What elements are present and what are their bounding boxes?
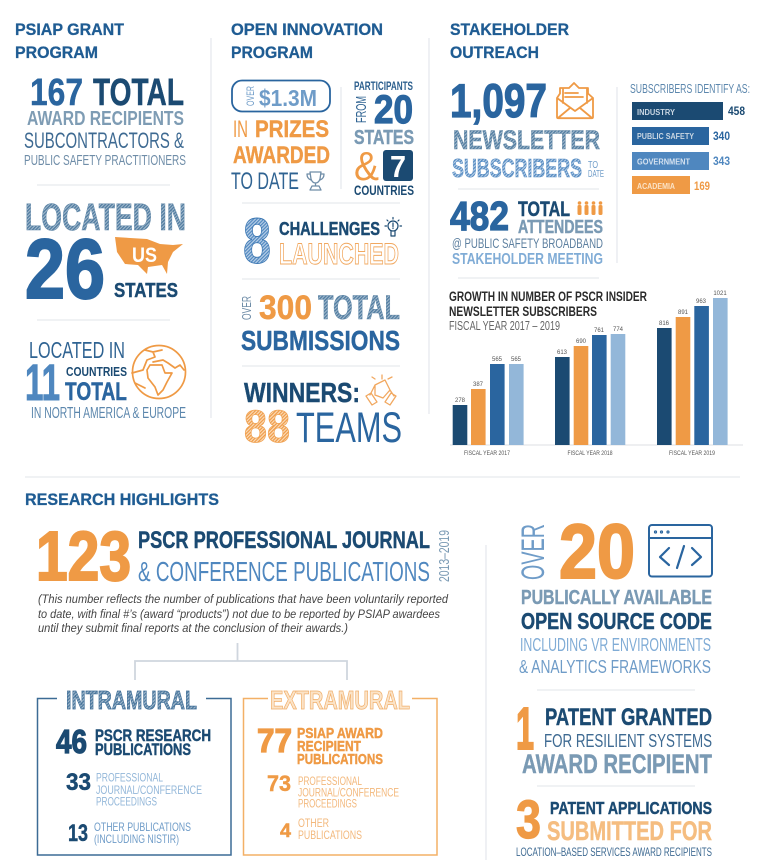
stat: 77 award recipient publications: PUBLICATIONS	[297, 752, 383, 768]
stat: over $1.3M in prizes: TO DATE	[231, 168, 299, 195]
stat: 3 patent applications	[516, 790, 712, 859]
stat: 1 patent granted	[516, 696, 712, 779]
bars: fiscal year 2018: FISCAL YEAR 2018	[568, 451, 613, 457]
stat: over $1.3M in prizes: AWARDED	[233, 142, 330, 169]
icon: US map: US	[132, 244, 157, 267]
stat: over 300 total submissions: TOTAL	[318, 289, 400, 327]
stat: 8 challenges launched	[243, 205, 399, 277]
bar: industry: 458	[728, 104, 745, 118]
stat: 123 publications: & CONFERENCE PUBLICATIONS	[138, 556, 430, 587]
heading: research highlights: RESEARCH HIGHLIGHTS	[25, 490, 219, 509]
heading: stakeholder outreach	[450, 20, 569, 62]
stat: 1,097 newsletter subscribers: SUBSCRIBERS	[452, 153, 582, 183]
stat: 8 challenges launched: LAUNCHED	[279, 238, 399, 271]
stat: winners 88 teams: TEAMS	[296, 404, 402, 452]
bar: industry	[632, 102, 745, 120]
stat: 482 total attendees: STAKEHOLDER MEETING	[452, 251, 603, 268]
stat: located in 11 countries: IN NORTH AMERICA & EUROPE	[31, 405, 186, 422]
heading: PSIAP grant program: PSIAP GRANT	[15, 20, 125, 39]
stat: 482 total attendees: 482	[450, 193, 509, 239]
bars: fiscal year 2017: 387	[473, 382, 484, 388]
stat: 8 challenges launched: CHALLENGES	[279, 218, 380, 239]
stat: 73 professional proceedings	[267, 771, 399, 810]
bars: fiscal year 2019: FISCAL YEAR 2019	[669, 451, 716, 457]
note: publication caveat: until they submit final reports at the conclusion of their awards.)	[38, 623, 348, 635]
stat: over 20 open source code: 20	[559, 509, 635, 595]
stat: 13 other publications: OTHER PUBLICATIONS	[94, 820, 191, 834]
stat: 73 professional proceedings: PROFESSIONAL	[298, 776, 362, 788]
stat: over $1.3M in prizes	[231, 80, 330, 195]
bars: fiscal year 2018	[555, 327, 625, 457]
chart: growth in PSCR Insider newsletter subscribers	[449, 289, 743, 457]
stat: 1,097 newsletter subscribers: NEWSLETTER	[453, 125, 600, 155]
bars: fiscal year 2017: 565	[511, 357, 522, 363]
stat: 4 other publications: OTHER	[298, 818, 329, 830]
bars: fiscal year 2017	[453, 357, 524, 457]
stat: 1 patent granted: FOR RESILIENT SYSTEMS	[544, 730, 712, 751]
stat: 13 other publications	[68, 820, 191, 847]
stat: over 20 open source code: OPEN SOURCE CODE	[521, 608, 712, 634]
stat: 77 award recipient publications: PSIAP AWARD	[297, 726, 383, 742]
stat: 1,097 newsletter subscribers	[450, 74, 604, 183]
stat: 77 award recipient publications: 77	[257, 722, 292, 759]
stat: located in 11 countries: COUNTRIES	[66, 364, 127, 379]
stat: 123 publications: PSCR PROFESSIONAL JOURNAL	[138, 527, 430, 554]
stat: over $1.3M in prizes: OVER	[245, 86, 257, 106]
note: publication caveat	[38, 594, 449, 635]
stat: 167 total award recipients: AWARD RECIPIENTS	[27, 108, 184, 130]
bars: fiscal year 2018: 690	[576, 339, 587, 345]
bars: fiscal year 2019: 891	[678, 310, 689, 316]
stat: located in 11 countries	[25, 337, 186, 422]
chart: growth in PSCR Insider newsletter subscribers: NEWSLETTER SUBSCRIBERS	[449, 304, 597, 319]
panel: research highlights	[25, 490, 453, 855]
panel: intramural	[38, 685, 231, 855]
stat: 167 total award recipients: 167	[30, 72, 83, 114]
stat: participants from 20 states and 7 countries	[353, 81, 414, 198]
stat: located in 11 countries: LOCATED IN	[29, 337, 125, 363]
stat: winners 88 teams	[244, 377, 402, 452]
stat: 167 total award recipients: SUBCONTRACTORS &	[24, 128, 184, 153]
stat: over 20 open source code	[515, 509, 712, 677]
stat: over $1.3M in prizes: IN	[233, 116, 248, 143]
bar chart: subscribers identify as	[630, 82, 750, 194]
chart: growth in PSCR Insider newsletter subscribers: FISCAL YEAR 2017 – 2019	[449, 318, 560, 333]
heading: open innovation program: OPEN INNOVATION	[231, 20, 383, 39]
bars: fiscal year 2019: 963	[696, 299, 707, 305]
stat: winners 88 teams: WINNERS:	[244, 377, 360, 408]
stat: 1 patent granted: PATENT GRANTED	[545, 704, 712, 731]
panel: open source and patents	[515, 509, 712, 859]
stat: 73 professional proceedings: 73	[267, 771, 291, 796]
stat: 1 patent granted: 1	[516, 696, 534, 762]
stat: over 300 total submissions: SUBMISSIONS	[241, 325, 400, 356]
bar: public safety: PUBLIC SAFETY	[637, 132, 695, 141]
stat: located in 26 US states: LOCATED IN	[25, 197, 186, 239]
heading: open innovation program	[231, 20, 383, 62]
heading: stakeholder outreach: OUTREACH	[450, 43, 539, 62]
stat: participants from 20 states and 7 countries: COUNTRIES	[354, 182, 414, 198]
stat: 167 total award recipients: TOTAL	[93, 72, 184, 114]
panel: intramural: INTRAMURAL	[66, 685, 197, 715]
tree connector	[135, 643, 347, 680]
bars: fiscal year 2018: 613	[557, 350, 568, 356]
stat: 123 publications: 2013–2019	[436, 530, 453, 582]
stat: over 20 open source code: & ANALYTICS FRAMEWORKS	[519, 656, 711, 677]
bars: fiscal year 2018: 761	[594, 328, 605, 334]
stat: 77 award recipient publications	[257, 722, 383, 768]
stat: 1,097 newsletter subscribers: DATE	[588, 168, 604, 180]
stat: 13 other publications: 13	[68, 820, 88, 847]
stat: over $1.3M in prizes: PRIZES	[255, 116, 329, 143]
stat: 482 total attendees: TOTAL	[518, 198, 570, 221]
icon: light bulb	[385, 218, 402, 236]
stat: 73 professional proceedings: JOURNAL/CONFERENCE	[298, 788, 399, 800]
stat: 33 professional proceedings: 33	[66, 769, 91, 796]
stat: participants from 20 states and 7 countries: PARTICIPANTS	[354, 81, 413, 93]
icon: four people	[578, 201, 602, 215]
stat: 73 professional proceedings: PROCEEDINGS	[298, 798, 357, 810]
stat: 1,097 newsletter subscribers: 1,097	[450, 74, 547, 127]
stat: participants from 20 states and 7 countries: STATES	[354, 127, 414, 149]
stat: 3 patent applications: 3	[516, 790, 541, 850]
stat: 167 total award recipients: PUBLIC SAFETY PRACTITIONERS	[24, 153, 186, 169]
icon: US map	[115, 237, 183, 274]
stat: 33 professional proceedings: JOURNAL/CONFERENCE	[96, 783, 202, 797]
icon: code window	[649, 525, 712, 576]
stat: 46 research publications	[56, 723, 211, 760]
panel: open innovation program	[231, 20, 414, 452]
stat: participants from 20 states and 7 countries: 7	[390, 149, 406, 184]
icon: high five hands	[366, 375, 396, 405]
stat: 13 other publications: (INCLUDING NISTIR)	[94, 832, 179, 846]
bar: government: 343	[713, 154, 730, 168]
stat: 3 patent applications: PATENT APPLICATIONS	[550, 798, 712, 818]
heading: stakeholder outreach: STAKEHOLDER	[450, 20, 569, 39]
stat: located in 26 US states: 26	[25, 222, 105, 316]
stat: 482 total attendees: @ PUBLIC SAFETY BROADBAND	[452, 235, 603, 251]
stat: over 20 open source code: PUBLICALLY AVAILABLE	[521, 587, 712, 609]
stat: over $1.3M in prizes: $1.3M	[259, 85, 317, 111]
stat: 8 challenges launched: 8	[243, 205, 271, 277]
panel: stakeholder outreach	[449, 20, 750, 457]
stat: 482 total attendees: ATTENDEES	[518, 217, 603, 237]
stat: 123 publications	[36, 517, 453, 595]
stat: 123 publications: 123	[36, 517, 131, 595]
stat: 482 total attendees	[450, 193, 603, 268]
panel: extramural	[244, 685, 437, 855]
stat: 33 professional proceedings: PROCEEDINGS	[96, 794, 157, 808]
stat: participants from 20 states and 7 countries: 20	[374, 88, 413, 132]
heading: open innovation program: PROGRAM	[231, 43, 313, 62]
icon: globe	[132, 346, 186, 398]
stat: 33 professional proceedings: PROFESSIONAL	[96, 770, 163, 784]
bars: fiscal year 2017: 565	[492, 357, 503, 363]
bar: industry: INDUSTRY	[637, 108, 676, 117]
chart: growth in PSCR Insider newsletter subscribers: GROWTH IN NUMBER OF PSCR INSIDER	[449, 289, 647, 304]
note: publication caveat: (This number reflects the number of publications that have been voluntarily reported	[38, 594, 449, 606]
bars: fiscal year 2017: 278	[455, 398, 466, 404]
bar: academia: ACADEMIA	[637, 182, 675, 191]
stat: 3 patent applications: SUBMITTED FOR	[547, 816, 712, 846]
bar: government	[632, 152, 730, 170]
icon: trophy	[307, 172, 324, 190]
stat: over 300 total submissions	[239, 289, 400, 356]
stat: winners 88 teams: 88	[244, 401, 290, 452]
bars: fiscal year 2018: 774	[613, 327, 624, 333]
bar: public safety: 340	[713, 129, 730, 143]
stat: 167 total award recipients	[24, 72, 186, 169]
bars: fiscal year 2017: FISCAL YEAR 2017	[464, 451, 511, 457]
stat: 1 patent granted: AWARD RECIPIENT	[522, 749, 712, 779]
note: publication caveat: to date, with final #’s (award “products”) not due to be reported by PSIAP awardees	[38, 609, 440, 621]
stat: participants from 20 states and 7 countries: &	[354, 143, 379, 189]
stat: participants from 20 states and 7 countries: FROM	[353, 96, 370, 123]
bar: academia: 169	[694, 179, 710, 193]
icon: open envelope	[557, 83, 593, 118]
stat: located in 11 countries: 11	[25, 354, 60, 411]
stat: 4 other publications: PUBLICATIONS	[298, 830, 362, 842]
panel: PSIAP grant program	[15, 20, 186, 422]
bar: public safety	[632, 127, 730, 145]
stat: 4 other publications	[280, 818, 362, 842]
stat: located in 26 US states: STATES	[114, 280, 178, 302]
bar: government: GOVERNMENT	[637, 158, 690, 166]
heading: PSIAP grant program: PROGRAM	[15, 43, 98, 62]
panel: extramural: EXTRAMURAL	[270, 685, 410, 715]
stat: 4 other publications: 4	[280, 821, 291, 842]
stat: over 300 total submissions: 300	[259, 289, 312, 327]
stat: 77 award recipient publications: RECIPIENT	[297, 739, 361, 755]
stat: 46 research publications: PSCR RESEARCH	[95, 726, 211, 745]
stat: located in 26 US states	[25, 197, 186, 316]
stat: over 20 open source code: OVER	[515, 524, 551, 580]
stat: located in 11 countries: TOTAL	[65, 378, 127, 406]
stat: over 300 total submissions: OVER	[239, 296, 254, 320]
stat: 46 research publications: PUBLICATIONS	[95, 740, 191, 759]
stat: 1,097 newsletter subscribers: TO	[588, 159, 598, 171]
bars: fiscal year 2019	[657, 291, 728, 457]
bars: fiscal year 2019: 1021	[713, 291, 727, 297]
stat: 33 professional proceedings	[66, 769, 202, 808]
bar: academia	[632, 176, 710, 194]
stat: 46 research publications: 46	[56, 723, 87, 760]
heading: PSIAP grant program	[15, 20, 125, 62]
bars: fiscal year 2019: 816	[659, 321, 670, 327]
